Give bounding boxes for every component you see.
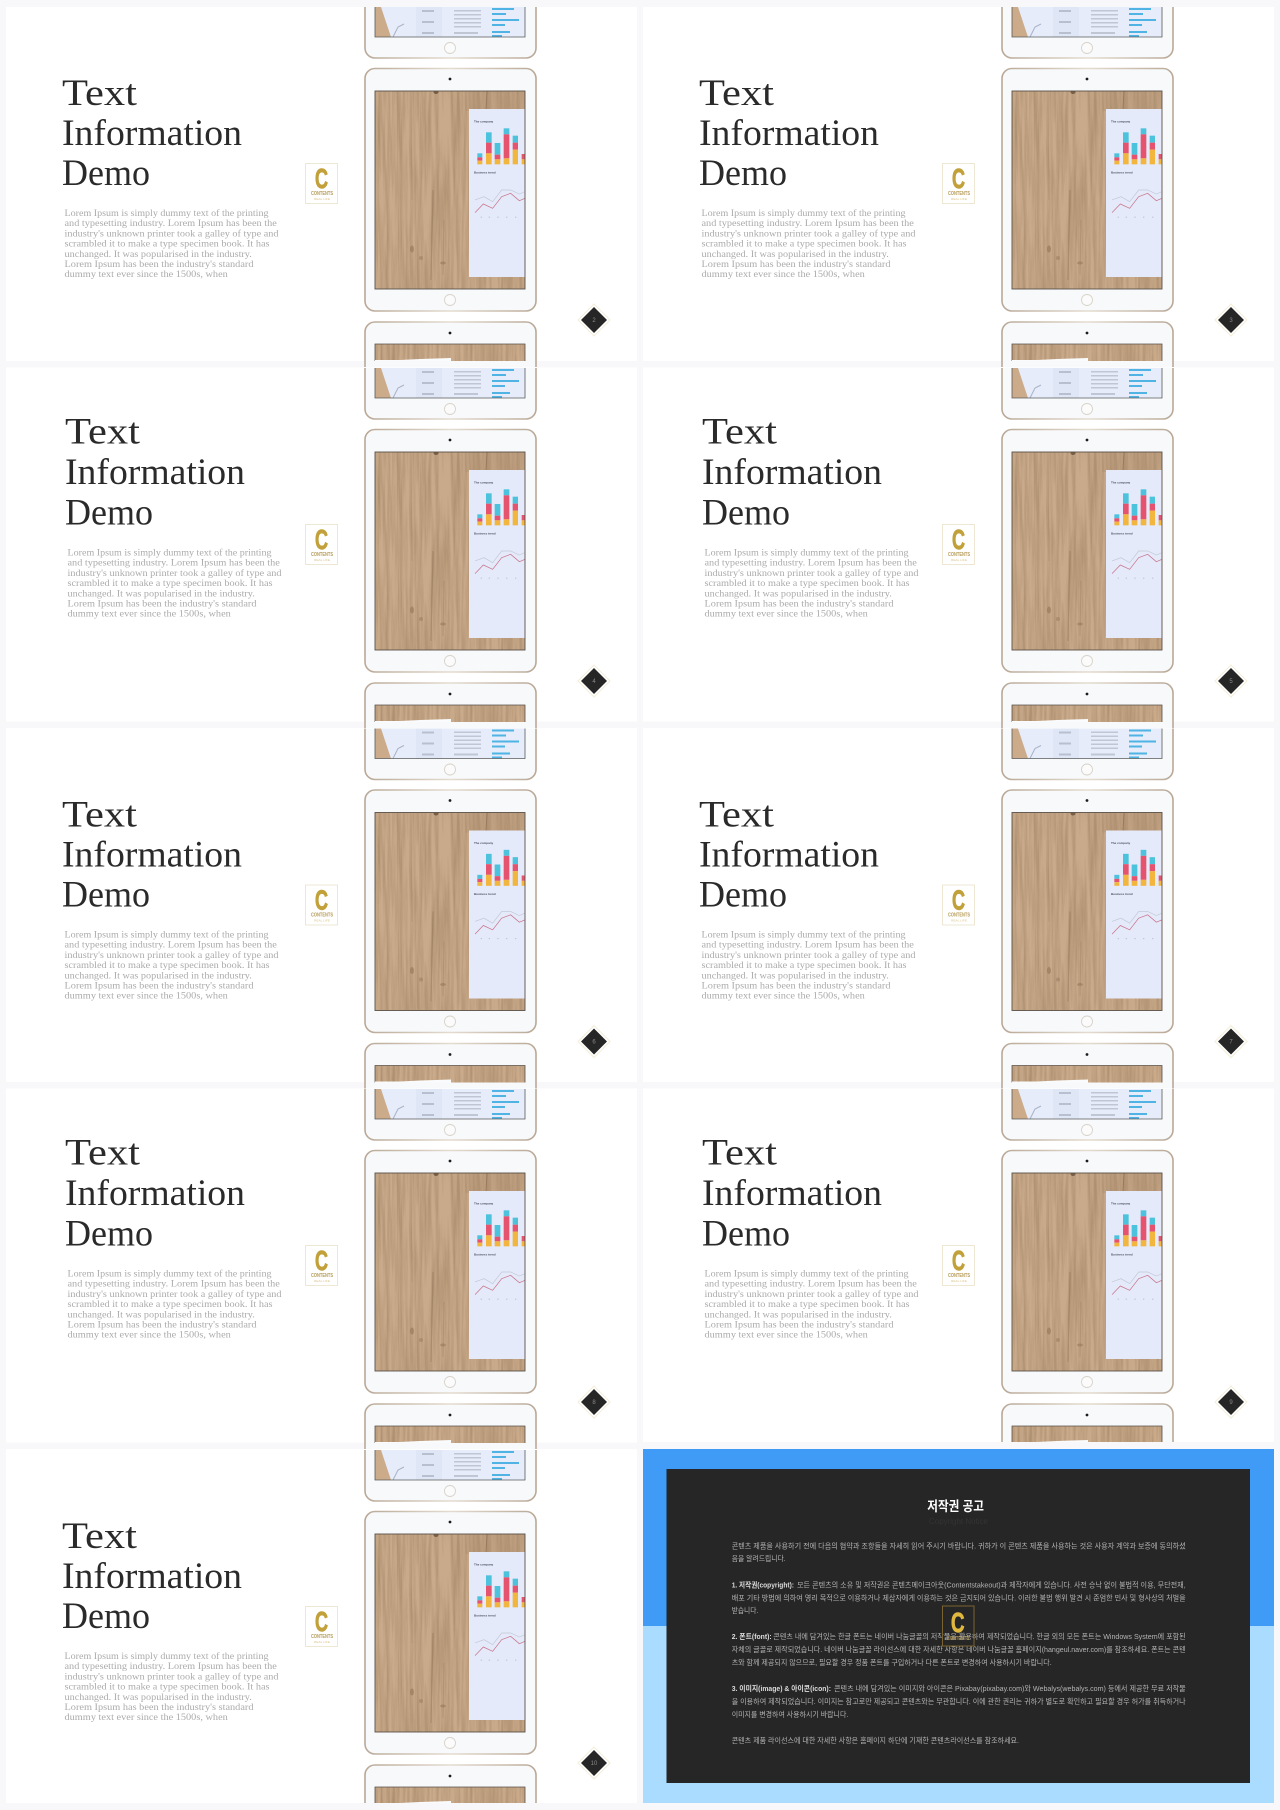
body text: and typesetting industry. Lorem Ipsum has been the [68, 1279, 280, 1290]
logo: CONTENTS [948, 1273, 971, 1279]
body text [702, 930, 916, 1002]
light blue background band [643, 1626, 1274, 1803]
body text: scrambled it to make a type specimen book. It has [702, 239, 907, 250]
body text: scrambled it to make a type specimen book. It has [68, 1299, 273, 1310]
page number badge [1215, 665, 1247, 697]
title: Information [65, 452, 245, 493]
title: Text [62, 1516, 138, 1557]
logo: CONTENTS [948, 191, 971, 197]
title: Demo [62, 874, 150, 916]
title: Information [699, 834, 879, 876]
logo: C [315, 884, 328, 916]
page number badge: 4 [592, 679, 596, 685]
body text: unchanged. It was popularised in the industry. [702, 970, 889, 981]
page number badge: 9 [1229, 1400, 1233, 1406]
logo on dark card: CONTENTS [947, 1636, 970, 1642]
body text: Lorem Ipsum has been the industry's standard [704, 598, 894, 610]
body text: dummy text ever since the 1500s, when [702, 991, 865, 1002]
title: Text [702, 1132, 778, 1174]
body text: scrambled it to make a type specimen book. It has [702, 960, 907, 971]
title: Demo [65, 1213, 153, 1254]
logo on dark card: C [951, 1607, 964, 1638]
body text: dummy text ever since the 1500s, when [64, 269, 228, 280]
logo: REAL LIFE [314, 1279, 330, 1283]
body text: industry's unknown printer took a galley of type and [68, 1289, 282, 1300]
body text: Lorem Ipsum is simply dummy text of the printing [68, 1268, 272, 1280]
page number badge: 8 [592, 1400, 596, 1406]
body text: Lorem Ipsum is simply dummy text of the printing [702, 208, 906, 219]
body text: unchanged. It was popularised in the industry. [64, 1692, 252, 1703]
body text: industry's unknown printer took a galley of type and [702, 950, 916, 961]
body text: Lorem Ipsum has been the industry's standard [702, 980, 891, 992]
notice body text: 1. 저작권(copyright): [732, 1580, 794, 1590]
logo: C [315, 1245, 328, 1276]
notice body text: 모든 콘텐츠의 소유 및 저작권은 콘텐츠메이크아웃(Contentstakeout)과 제작자에게 있습니다. 사전 승낙 없이 불법적 이용, 무단전재, [797, 1580, 1186, 1590]
body text: and typesetting industry. Lorem Ipsum has been the [702, 940, 914, 951]
panel: copyright notice [637, 1442, 1280, 1803]
logo [942, 884, 974, 925]
body text: industry's unknown printer took a galley of type and [64, 950, 279, 961]
ipad mockup column [365, 728, 536, 1088]
body text: Lorem Ipsum has been the industry's standard [68, 598, 257, 610]
panel: slide 3 [643, 7, 1274, 367]
logo: REAL LIFE [314, 197, 330, 201]
body text: scrambled it to make a type specimen book. It has [704, 578, 910, 589]
page number badge [578, 304, 610, 336]
logo [306, 884, 338, 925]
logo: CONTENTS [311, 1273, 334, 1279]
page number badge [578, 1026, 610, 1058]
logo: REAL LIFE [951, 558, 967, 562]
notice body text: 이미지를 변경하여 사용하시기 바랍니다. [732, 1709, 848, 1719]
notice body text: 콘텐츠 제품을 사용하기 전에 다음의 협약과 조항들을 자세히 읽어 주시기 바랍니다. 귀하가 이 콘텐츠 제품을 사용하는 것은 사용자 계약과 보증에 동의하셨 [732, 1540, 1186, 1550]
panel: slide 5 [643, 368, 1274, 728]
title [65, 1132, 245, 1254]
logo: REAL LIFE [951, 918, 967, 922]
logo: C [315, 1606, 328, 1637]
page number badge: 5 [1229, 679, 1233, 685]
title: Information [62, 113, 242, 154]
title [65, 412, 245, 533]
ipad mockup column [365, 7, 536, 367]
body text: scrambled it to make a type specimen book. It has [704, 1299, 910, 1310]
body text: Lorem Ipsum has been the industry's standard [702, 259, 891, 270]
body text: scrambled it to make a type specimen book. It has [64, 1682, 270, 1693]
bottom margin [0, 1803, 1280, 1810]
body text: Lorem Ipsum is simply dummy text of the printing [64, 930, 269, 940]
logo: C [952, 524, 965, 555]
title [702, 1132, 882, 1254]
panel: slide 9 [643, 1088, 1274, 1449]
body text: dummy text ever since the 1500s, when [68, 1330, 231, 1341]
title: Information [65, 1173, 245, 1214]
body text: and typesetting industry. Lorem Ipsum has been the [68, 558, 280, 569]
logo: C [315, 163, 328, 194]
body text: scrambled it to make a type specimen book. It has [68, 578, 273, 589]
logo: CONTENTS [948, 912, 971, 918]
title: Text [65, 412, 141, 452]
title [699, 73, 879, 194]
body text: and typesetting industry. Lorem Ipsum has been the [64, 218, 277, 229]
body text: Lorem Ipsum has been the industry's standard [64, 259, 254, 270]
body text [704, 548, 919, 620]
logo on dark card [942, 1606, 974, 1646]
notice body text: 배포 기타 방법에 의하여 영리 목적으로 이용하거나 제삼자에게 이용하는 것은 금지되어 있습니다. 이러한 불법 행위 발견 시 준엄한 민사 및 형사상의 처벌을 [732, 1592, 1186, 1602]
logo [942, 1245, 974, 1286]
notice body text: 콘텐츠 제품 라이선스에 대한 자세한 사항은 홈페이지 하단에 기재한 콘텐츠라이선스를 참조하세요. [732, 1735, 1019, 1745]
body text: Lorem Ipsum is simply dummy text of the printing [704, 1268, 909, 1280]
title [62, 73, 242, 194]
title: Demo [62, 153, 150, 194]
body text: and typesetting industry. Lorem Ipsum has been the [64, 940, 277, 951]
notice heading [927, 1499, 989, 1526]
logo: REAL LIFE [951, 1279, 967, 1283]
body text [704, 1268, 919, 1341]
notice body text [732, 1540, 1186, 1745]
body text: Lorem Ipsum has been the industry's standard [64, 980, 254, 992]
title: Information [62, 1556, 242, 1597]
notice heading: Copyright Notice [929, 1517, 989, 1526]
panel: slide 10 [6, 1449, 637, 1810]
ipad mockup column [1002, 368, 1173, 728]
ipad mockup column [1002, 1089, 1173, 1449]
body text: industry's unknown printer took a galley of type and [704, 1289, 919, 1300]
panel: slide 2 [6, 7, 637, 367]
dark notice card [666, 1469, 1250, 1783]
body text [68, 1268, 282, 1341]
logo: REAL LIFE [951, 197, 967, 201]
title: Demo [65, 492, 153, 533]
page number badge: 10 [591, 1761, 598, 1767]
body text: scrambled it to make a type specimen book. It has [64, 960, 270, 971]
body text: and typesetting industry. Lorem Ipsum has been the [704, 558, 917, 569]
panel: slide 7 [643, 728, 1274, 1088]
body text: Lorem Ipsum is simply dummy text of the printing [64, 1651, 269, 1662]
panel: slide 4 [6, 368, 637, 728]
body text: Lorem Ipsum has been the industry's standard [68, 1320, 257, 1330]
body text: unchanged. It was popularised in the industry. [68, 588, 255, 599]
notice body text: 3. 이미지(image) & 아이콘(icon): [732, 1683, 831, 1693]
body text [64, 208, 279, 280]
body text: and typesetting industry. Lorem Ipsum has been the [704, 1279, 917, 1290]
title: Demo [699, 153, 787, 194]
body text: and typesetting industry. Lorem Ipsum has been the [64, 1661, 277, 1672]
logo: REAL LIFE [314, 558, 330, 562]
notice body text: 츠와 함께 제공되지 않으므로, 필요할 경우 정품 폰트를 구입하거나 다른 폰트로 변경하여 사용하시기 바랍니다. [732, 1657, 1052, 1667]
logo: C [315, 524, 328, 555]
page number badge [1215, 1026, 1247, 1058]
body text: scrambled it to make a type specimen book. It has [64, 239, 270, 250]
body text: Lorem Ipsum is simply dummy text of the printing [64, 208, 269, 219]
title: Demo [702, 1213, 790, 1254]
body text: industry's unknown printer took a galley of type and [64, 1671, 279, 1682]
body text: unchanged. It was popularised in the industry. [68, 1309, 255, 1320]
title: Information [62, 834, 242, 876]
body text: unchanged. It was popularised in the industry. [704, 588, 892, 599]
ipad mockup column [365, 1089, 536, 1449]
title: Demo [699, 874, 787, 916]
body text: dummy text ever since the 1500s, when [704, 609, 868, 620]
body text: Lorem Ipsum is simply dummy text of the printing [68, 548, 272, 558]
ipad mockup column [1002, 7, 1173, 367]
title: Demo [62, 1596, 150, 1637]
ipad mockup column [365, 1450, 536, 1810]
title: Information [702, 452, 882, 493]
title: Information [699, 113, 879, 154]
logo: REAL LIFE [314, 1640, 330, 1644]
logo: CONTENTS [311, 1634, 334, 1640]
logo [306, 163, 338, 204]
title [62, 1516, 242, 1637]
ipad mockup column [365, 368, 536, 728]
body text: Lorem Ipsum has been the industry's standard [64, 1702, 254, 1713]
notice heading: 저작권 공고 [927, 1499, 984, 1514]
title: Text [62, 794, 138, 836]
title: Information [702, 1173, 882, 1214]
body text: unchanged. It was popularised in the industry. [64, 970, 252, 981]
title: Text [62, 73, 138, 114]
body text: Lorem Ipsum is simply dummy text of the printing [704, 548, 909, 558]
title: Text [65, 1132, 141, 1174]
logo [942, 163, 974, 204]
logo: CONTENTS [311, 191, 334, 197]
logo [942, 524, 974, 564]
body text: dummy text ever since the 1500s, when [68, 609, 231, 620]
body text: industry's unknown printer took a galley of type and [68, 568, 282, 579]
body text: dummy text ever since the 1500s, when [64, 1712, 228, 1723]
panel: slide 8 [6, 1088, 637, 1449]
page number badge [1215, 1386, 1247, 1418]
page number badge: 6 [592, 1040, 596, 1046]
body text: dummy text ever since the 1500s, when [64, 991, 228, 1002]
body text: unchanged. It was popularised in the industry. [702, 249, 889, 260]
title [702, 412, 882, 533]
page number badge [578, 665, 610, 697]
notice body text: 음을 알려드립니다. [732, 1553, 786, 1563]
body text: Lorem Ipsum is simply dummy text of the printing [702, 930, 906, 940]
body text: dummy text ever since the 1500s, when [704, 1330, 868, 1341]
body text: dummy text ever since the 1500s, when [702, 269, 865, 280]
body text [64, 1651, 279, 1723]
logo: C [952, 1245, 965, 1276]
body text [68, 548, 282, 620]
logo: CONTENTS [311, 912, 334, 918]
body text: Lorem Ipsum has been the industry's standard [704, 1320, 894, 1330]
page number badge: 7 [1229, 1040, 1233, 1046]
body text: and typesetting industry. Lorem Ipsum has been the [702, 218, 914, 229]
notice body text: 을 이용하여 제작되었습니다. 이미지는 참고로만 제공되고 콘텐츠와는 무관합니다. 이에 관한 권리는 귀하가 별도로 확인하고 필요할 경우 허가를 취득하거나 [732, 1696, 1186, 1706]
title: Text [702, 412, 778, 452]
logo [306, 524, 338, 564]
body text: industry's unknown printer took a galley of type and [702, 228, 916, 239]
notice body text: 받습니다. [732, 1605, 758, 1615]
notice body text: 2. 폰트(font): [732, 1632, 772, 1641]
body text [64, 930, 279, 1002]
page number badge [1215, 304, 1247, 336]
notice body text: 자체의 글꼴로 제작되었습니다. 네이버 나눔글꼴 라이선스에 대한 자세한 사항은 네이버 나눔글꼴 홈페이지(hangeul.naver.com)를 참조하세요. 폰트는 콘텐 [732, 1644, 1186, 1654]
body text: industry's unknown printer took a galley of type and [704, 568, 919, 579]
page number badge: 2 [592, 318, 596, 324]
title: Demo [702, 492, 790, 533]
page number badge [578, 1747, 610, 1779]
logo: CONTENTS [311, 552, 334, 558]
blue background band [643, 1449, 1274, 1626]
title [699, 794, 879, 916]
body text: industry's unknown printer took a galley of type and [64, 228, 279, 239]
body text: unchanged. It was popularised in the industry. [64, 249, 252, 260]
logo: REAL LIFE [314, 918, 330, 922]
title: Text [699, 794, 775, 836]
logo [306, 1245, 338, 1286]
title: Text [699, 73, 775, 114]
logo: CONTENTS [948, 552, 971, 558]
body text: unchanged. It was popularised in the industry. [704, 1309, 892, 1320]
notice body text: 콘텐츠 내에 담겨있는 이미지와 아이콘은 Pixabay(pixabay.com)와 Webalys(webalys.com) 등에서 제공한 무료 저작물 [834, 1683, 1186, 1693]
ipad mockup column [1002, 728, 1173, 1088]
page number badge: 3 [1229, 318, 1233, 324]
title [62, 794, 242, 916]
page number badge [578, 1386, 610, 1418]
panel: slide 6 [6, 728, 637, 1088]
body text [702, 208, 916, 280]
notice body text: 콘텐츠 내에 담겨있는 한글 폰트는 네이버 나눔글꼴의 저작물을 활용하여 제작되었습니다. 한글 외의 모든 폰트는 Windows System에 포함된 [773, 1631, 1186, 1641]
logo [306, 1606, 338, 1646]
logo: C [952, 884, 965, 916]
logo: C [952, 163, 965, 194]
